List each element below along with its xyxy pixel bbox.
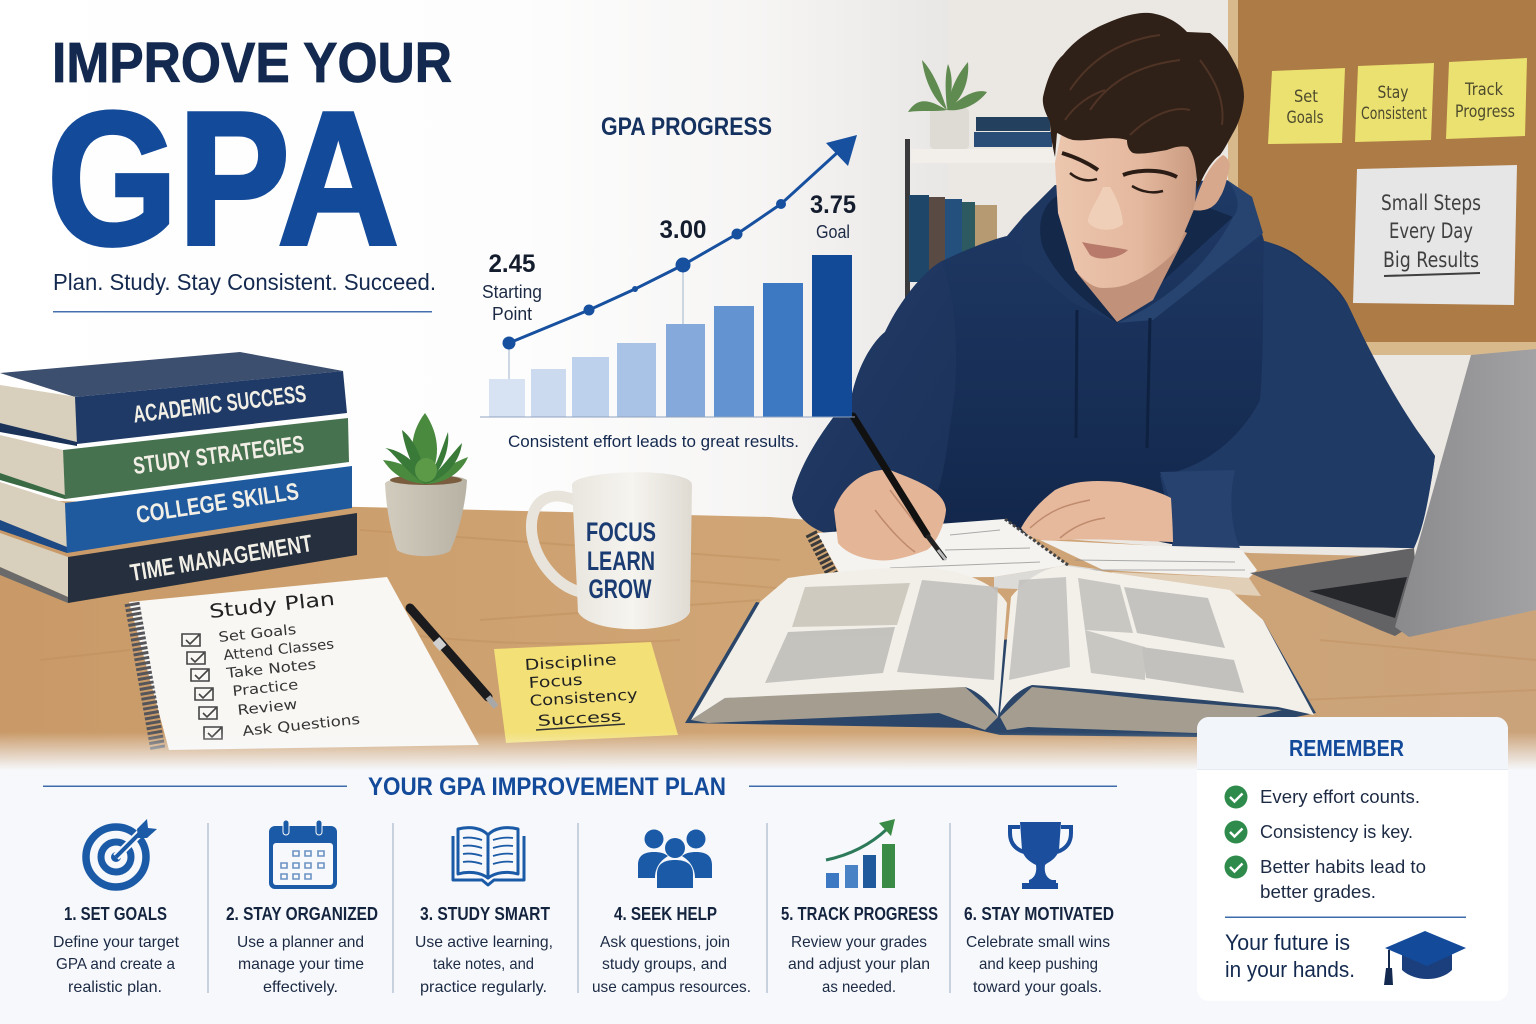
title: IMPROVE YOUR [52,31,452,95]
sticky note: stay consistent [1355,63,1434,142]
finger detail [875,490,930,552]
trend line and arrow [502,135,857,350]
data labels [482,191,856,324]
book: college skills: COLLEGE SKILLS [134,478,301,529]
sticky note: track progress: Track [1464,80,1503,100]
guide lines [509,265,683,379]
fade into plan section [0,732,1536,770]
book: academic success: ACADEMIC SUCCESS [132,381,308,429]
checkboxes [182,634,222,739]
laptop [1250,349,1536,637]
study plan notebook: Ask Questions [242,712,361,740]
face [1055,100,1197,288]
icon: trophy [1010,822,1071,889]
study plan notebook: Review [237,697,298,719]
book: study strategies: STUDY STRATEGIES [132,431,306,480]
step 3: study smart: Use active learning, [415,934,553,951]
pen on desk [410,608,496,707]
step 5: track progress [781,819,938,996]
step 6: stay motivated: Celebrate small wins [966,934,1110,951]
checklist [1224,786,1426,902]
data labels: Point [492,304,532,324]
hood collar right [1117,180,1263,323]
icon: graduation cap [1384,931,1466,985]
step 2: stay organized [226,820,378,996]
step 2: stay organized: effectively. [263,979,338,996]
text blocks [765,577,1244,693]
right page [1000,566,1314,715]
background right wall [948,0,1536,560]
step 5: track progress: as needed. [822,979,896,996]
background wall [0,0,948,530]
book: time management [0,513,357,603]
plan section background [0,770,1536,1024]
icon: growth chart [826,819,895,888]
plan heading: YOUR GPA IMPROVEMENT PLAN [368,773,726,801]
panel: remember [1197,717,1508,1001]
hoodie body [792,180,1435,548]
drawstrings [1076,310,1150,448]
pen in hand [853,416,946,560]
sticky note: stay consistent: Consistent [1361,104,1427,124]
data labels: 3.75 [810,191,856,219]
sticky note: track progress [1446,58,1527,139]
book: study strategies [0,418,349,499]
right page stack [1000,687,1282,733]
title: GPA [47,73,399,285]
step 3: study smart: take notes, and [433,956,534,973]
step 3: study smart: 3. STUDY SMART [420,904,550,924]
data labels: 3.00 [660,216,706,244]
step 1: set goals: 1. SET GOALS [64,904,167,924]
right sleeve shading [1160,241,1435,548]
coffee mug [531,472,692,629]
book: time management: TIME MANAGEMENT [128,530,314,587]
neck [1077,200,1187,322]
yellow sticky note: Success [537,707,622,730]
closing message: Your future is [1225,930,1350,955]
book: academic success [0,352,347,446]
step 4: seek help: use campus resources. [592,979,751,996]
bookshelf [905,60,1055,299]
hair [1043,13,1244,190]
study plan notebook: Attend Classes [223,636,335,664]
coffee mug: LEARN [587,546,655,576]
pinned note: small steps: Every Day [1389,219,1473,243]
data labels: 2.45 [488,250,536,278]
step 3: study smart: practice regularly. [420,979,547,996]
left page [691,568,1007,720]
hood inside [1040,190,1233,323]
chart caption: Consistent effort leads to great results. [508,432,799,451]
yellow sticky note: Focus [528,671,583,692]
finger detail [1030,500,1105,538]
checklist: Every effort counts. [1260,787,1420,807]
step 2: stay organized: 2. STAY ORGANIZED [226,904,378,924]
left page stack [691,687,998,730]
pinned note: small steps: Big Results [1383,248,1479,272]
right cuff [1160,470,1240,548]
checklist: Consistency is key. [1260,822,1413,842]
study plan notebook: Study Plan [208,588,336,623]
tagline: Plan. Study. Stay Consistent. Succeed. [53,269,436,295]
icon: target [86,819,157,887]
checklist: Better habits lead to [1260,857,1426,877]
step 6: stay motivated [964,822,1114,996]
step 6: stay motivated: toward your goals. [973,979,1102,996]
step 6: stay motivated: and keep pushing [979,956,1098,973]
resting hand [1021,481,1173,542]
step 2: stay organized: manage your time [238,956,364,973]
left sleeve shading [792,261,956,535]
cover [685,602,1316,737]
checklist: better grades. [1260,882,1376,902]
yellow sticky note [494,642,678,743]
GPA progress chart [480,113,857,451]
step 1: set goals: Define your target [53,934,180,951]
writing hand [834,470,946,561]
eyebrows, eyes, nose and mouth [1062,153,1177,192]
person [792,13,1435,548]
step 4: seek help [592,830,751,996]
stack of textbooks [0,352,357,603]
chart title: GPA PROGRESS [601,113,772,141]
yellow sticky note: Discipline [524,650,617,674]
step 2: stay organized: Use a planner and [237,934,364,951]
step 4: seek help: Ask questions, join [600,934,730,951]
step 5: track progress: and adjust your plan [788,956,930,973]
step 6: stay motivated: 6. STAY MOTIVATED [964,904,1114,924]
potted plant [383,413,468,556]
data labels: Starting [482,282,542,302]
step 4: seek help: study groups, and [602,956,727,973]
study plan notebook: Set Goals [218,622,297,646]
step 4: seek help: 4. SEEK HELP [614,904,717,924]
step 3: study smart [415,828,553,996]
sticky note: set goals [1268,68,1345,144]
spiral notebook on desk [811,519,1261,596]
sticky note: set goals: Goals [1286,108,1324,128]
hood collar left [1022,185,1117,323]
yellow sticky note: Consistency [529,685,638,710]
step 1: set goals: realistic plan. [68,979,162,996]
icon: group of people [638,830,712,888]
pinned note: small steps [1353,165,1517,305]
study plan notebook: Take Notes [225,657,317,682]
sticky note: track progress: Progress [1455,102,1515,122]
panel: remember: REMEMBER [1289,735,1404,761]
study plan notebook: Practice [232,677,299,700]
study plan notebook [129,577,479,750]
icon: open book [453,828,524,885]
bars [489,255,852,417]
coffee mug: FOCUS [586,517,656,547]
pinned note: small steps: Small Steps [1381,191,1481,215]
step 5: track progress: Review your grades [791,934,927,951]
data labels: Goal [816,222,850,242]
coffee mug: GROW [588,574,652,604]
hair highlights [1065,35,1223,135]
closing message: in your hands. [1225,957,1355,982]
open textbook [685,566,1316,737]
sticky note: stay consistent: Stay [1378,83,1408,103]
closing message [1225,930,1355,982]
book: college skills [0,466,352,553]
corkboard [1228,0,1536,355]
sticky note: set goals: Set [1294,87,1318,107]
step 1: set goals [53,819,180,996]
step 5: track progress: 5. TRACK PROGRESS [781,904,938,924]
icon: calendar [269,820,337,889]
ear [1193,155,1230,210]
desk [0,500,1536,770]
step 1: set goals: GPA and create a [56,956,175,973]
